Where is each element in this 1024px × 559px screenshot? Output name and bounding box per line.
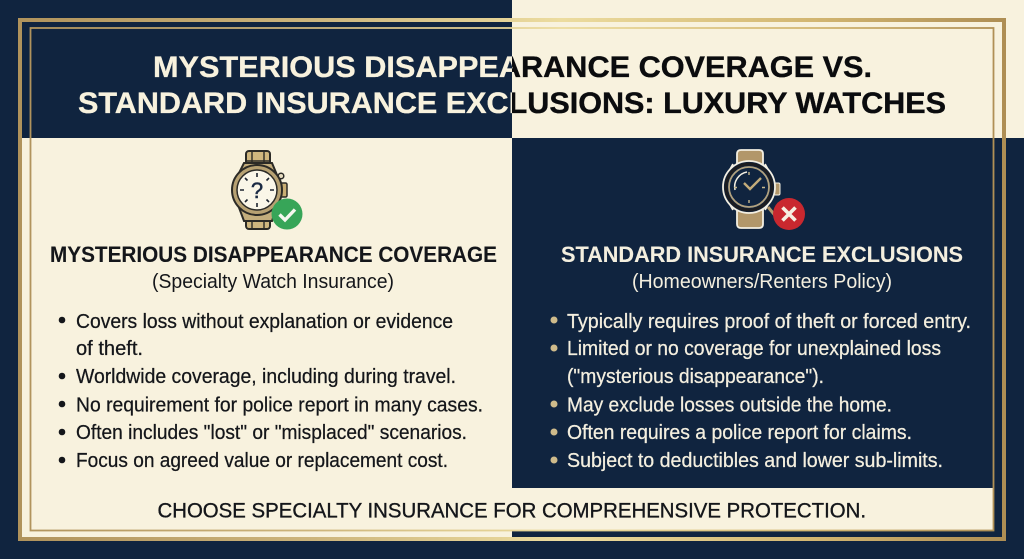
left heading: MYSTERIOUS DISAPPEARANCE COVERAGE (50, 242, 497, 267)
right bullet list: Subject to deductibles and lower sub-limits. (567, 450, 943, 472)
left subheading: (Specialty Watch Insurance) (152, 271, 394, 293)
left bullet list: No requirement for police report in many cases. (76, 394, 483, 416)
icon: gold watch with question mark and green check (232, 151, 302, 230)
left bullet list: Covers loss without explanation or evidence (76, 311, 453, 333)
right bullet list: Limited or no coverage for unexplained loss (567, 338, 941, 360)
right subheading: (Homeowners/Renters Policy) (632, 271, 892, 293)
left bullet list: of theft. (76, 338, 143, 360)
panel: standard insurance exclusions (550, 150, 971, 472)
left bullet list (59, 311, 483, 472)
icon: watch with red cross (723, 150, 805, 230)
right bullet list: Typically requires proof of theft or forced entry. (567, 311, 971, 333)
title: STANDARD INSURANCE EXCLUSIONS: LUXURY WATCHES (78, 87, 946, 120)
left bullet list: Worldwide coverage, including during travel. (76, 366, 456, 388)
icon: gold watch with question mark and green check: ? (251, 178, 263, 203)
right bullet list (550, 311, 971, 472)
footer callout: CHOOSE SPECIALTY INSURANCE FOR COMPREHENSIVE PROTECTION. (158, 498, 866, 522)
right bullet list: May exclude losses outside the home. (567, 394, 892, 416)
title: MYSTERIOUS DISAPPEARANCE COVERAGE VS. (153, 51, 872, 84)
panel: mysterious disappearance coverage (50, 151, 497, 472)
title (78, 51, 946, 120)
left bullet list: Often includes "lost" or "misplaced" scenarios. (76, 422, 467, 444)
right heading: STANDARD INSURANCE EXCLUSIONS (561, 242, 963, 267)
right bullet list: ("mysterious disappearance"). (567, 366, 824, 388)
right bullet list: Often requires a police report for claims. (567, 422, 912, 444)
left bullet list: Focus on agreed value or replacement cost. (76, 450, 448, 472)
